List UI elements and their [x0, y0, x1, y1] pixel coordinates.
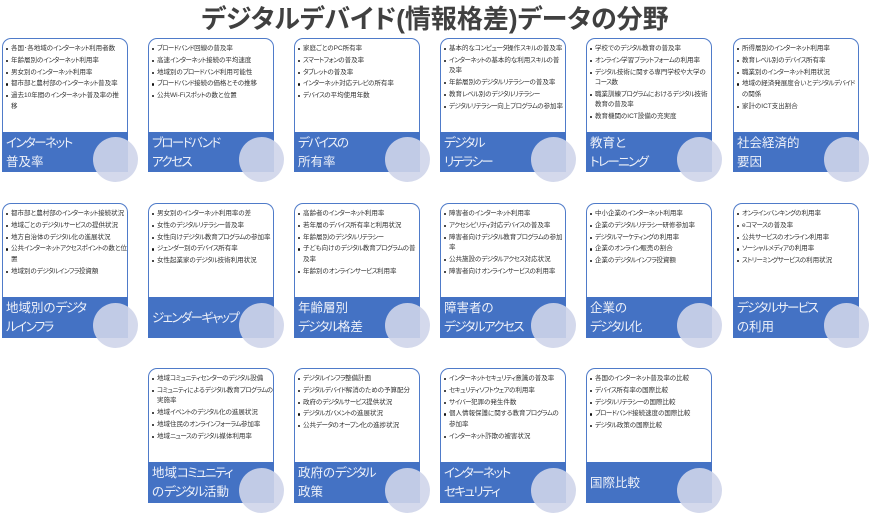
panel: デジタルサービスの利用: ソーシャルメディアの利用率 — [742, 245, 814, 252]
panel: 教育とトレーニング: 職業訓練プログラムにおけるデジタル技術 — [595, 91, 708, 98]
panel: デジタルリテラシー: 年齢層別のデジタルリテラシーの普及率 — [449, 79, 555, 86]
panel: デバイスの所有率 — [294, 38, 430, 182]
panel: 教育とトレーニング: 教育機関のICT設備の充実度 — [595, 113, 677, 120]
panel: ブロードバンドアクセス: 地域別のブロードバンド利用可能性 — [157, 69, 252, 76]
panel: インターネット普及率: 男女別のインターネット利用率 — [11, 69, 92, 76]
panel: 地域別のデジタルインフラ: 地方自治体のデジタル化の進展状況 — [11, 234, 110, 241]
panel: デジタルリテラシー — [440, 38, 576, 182]
panel: インターネット普及率: 年齢層別のインターネット利用率 — [11, 57, 99, 64]
panel: ジェンダーギャップ: 女性起業家のデジタル技術利用状況 — [157, 257, 257, 264]
panel: デバイスの所有率: 家庭ごとのPC所有率 — [303, 45, 362, 52]
panel: ブロードバンドアクセス: ブロードバンド回線の普及率 — [157, 45, 233, 52]
panel: ジェンダーギャップ: 女性のデジタルリテラシー普及率 — [157, 222, 244, 229]
panel: 社会経済的要因 — [733, 38, 869, 182]
panel: デジタルリテラシー: 教育レベル別のデジタルリテラシー — [449, 91, 540, 98]
panel: 企業のデジタル化: 企業の — [590, 301, 627, 315]
panel: デジタルリテラシー: デジタルリテラシー向上プログラムの参加率 — [449, 103, 563, 110]
panel: ジェンダーギャップ: ジェンダーギャップ — [152, 311, 238, 325]
title: デジタルデバイド(情報格差)データの分野 — [201, 4, 669, 34]
panel: ブロードバンドアクセス: ブロードバンド接続の価格とその推移 — [157, 80, 257, 87]
panel: 地域コミュニティのデジタル活動: 地域イベントのデジタル化の進展状況 — [157, 409, 258, 416]
panel: 政府のデジタル政策: 政策 — [298, 485, 323, 499]
panel: ジェンダーギャップ — [148, 203, 284, 348]
panel: 国際比較: 各国のインターネット普及率の比較 — [595, 375, 689, 382]
panel: 教育とトレーニング — [586, 38, 722, 182]
panel: 企業のデジタル化: 企業のデジタルインフラ投資額 — [595, 257, 676, 264]
panel: 社会経済的要因: 教育レベル別のデバイス所有率 — [742, 57, 825, 64]
panel: 年齢層別デジタル格差 — [294, 203, 430, 348]
panel: 地域別のデジタルインフラ: 置 — [11, 256, 18, 263]
panel: 年齢層別デジタル格差: 及率 — [303, 256, 316, 263]
panel: 障害者のデジタルアクセス: 障害者向けデジタル教育プログラムの参加 — [449, 234, 563, 241]
panel: 教育とトレーニング: 教育の普及率 — [595, 101, 634, 108]
panel: 障害者のデジタルアクセス — [440, 203, 576, 348]
panel: 社会経済的要因: 所得層別のインターネット利用率 — [742, 45, 830, 52]
panel: インターネットセキュリティ: インターネット詐欺の被害状況 — [449, 433, 530, 440]
panel: 地域コミュニティのデジタル活動: のデジタル活動 — [152, 485, 229, 499]
panel: 企業のデジタル化: 企業のデジタルリテラシー研修参加率 — [595, 222, 695, 229]
panel: 企業のデジタル化: デジタル化 — [590, 320, 642, 334]
panel: 政府のデジタル政策 — [294, 368, 430, 513]
panel: 地域別のデジタルインフラ: 公共インターネットアクセスポイントの数と位 — [11, 245, 127, 252]
panel: 政府のデジタル政策: デジタルデバイド解消のための予算配分 — [303, 387, 410, 394]
panel: 障害者のデジタルアクセス: 率 — [449, 244, 456, 251]
panel: 地域別のデジタルインフラ: 地域ごとのデジタルサービスの提供状況 — [11, 222, 118, 229]
panel: 国際比較: デジタル政策の国際比較 — [595, 422, 662, 429]
panel: 政府のデジタル政策: デジタルインフラ整備計画 — [303, 375, 371, 382]
panel: デバイスの所有率: デバイスの平均使用年数 — [303, 92, 370, 99]
panel: 障害者のデジタルアクセス: 障害者向けオンラインサービスの利用率 — [449, 268, 555, 275]
panel: 国際比較 — [586, 368, 722, 513]
panel: デバイスの所有率: 所有率 — [298, 154, 336, 168]
panel: ブロードバンドアクセス — [148, 38, 284, 182]
panel: 社会経済的要因: 家計のICT支出割合 — [742, 103, 798, 110]
panel: ブロードバンドアクセス: アクセス — [152, 154, 191, 168]
panel: 年齢層別デジタル格差: 若年層のデバイス所有率と利用状況 — [303, 222, 401, 229]
panel: 教育とトレーニング: 学校でのデジタル教育の普及率 — [595, 45, 681, 52]
panel: 地域コミュニティのデジタル活動 — [148, 368, 284, 513]
panel: 年齢層別デジタル格差: デジタル格差 — [298, 320, 363, 334]
panel: 企業のデジタル化 — [586, 203, 722, 348]
panel: 障害者のデジタルアクセス: アクセシビリティ対応デバイスの普及率 — [449, 222, 550, 229]
panel: デジタルリテラシー: 及率 — [449, 67, 462, 74]
panel: インターネットセキュリティ: サイバー犯罪の発生件数 — [449, 399, 516, 406]
panel: 国際比較: 国際比較 — [590, 476, 640, 490]
panel: 企業のデジタル化: デジタルマーケティングの利用率 — [595, 234, 679, 241]
panel: 教育とトレーニング: コース数 — [595, 79, 618, 86]
panel: デジタルサービスの利用: ストリーミングサービスの利用状況 — [742, 257, 832, 264]
panel: 国際比較: デバイス所有率の国際比較 — [595, 387, 668, 394]
panel: デバイスの所有率: スマートフォンの普及率 — [303, 57, 364, 64]
panel: 地域コミュニティのデジタル活動: 地域コミュニティセンターのデジタル設備 — [157, 375, 263, 382]
panel: 地域別のデジタルインフラ: 地域別のデジタ — [6, 301, 85, 315]
panel: 障害者のデジタルアクセス: 障害者の — [444, 301, 494, 315]
panel: 年齢層別デジタル格差: 子ども向けのデジタル教育プログラムの普 — [303, 245, 415, 252]
panel: 障害者のデジタルアクセス: 公共施設のデジタルアクセス対応状況 — [449, 256, 551, 263]
panel: 障害者のデジタルアクセス: 障害者のインターネット利用率 — [449, 210, 530, 217]
panel: 教育とトレーニング: トレーニング — [590, 154, 647, 168]
panel: デジタルサービスの利用: デジタルサービス — [737, 301, 817, 315]
panel: インターネットセキュリティ: インターネット — [444, 466, 510, 480]
panel: 社会経済的要因: 社会経済的 — [737, 136, 800, 150]
panel: 地域コミュニティのデジタル活動: 地域ニュースのデジタル媒体利用率 — [157, 433, 252, 440]
panel: 社会経済的要因: 地域の経済発展度合いとデジタルデバイド — [742, 80, 855, 87]
panel: インターネット普及率 — [2, 38, 138, 182]
panel: インターネットセキュリティ: 個人情報保護に関する教育プログラムの — [449, 410, 559, 417]
panel: デジタルリテラシー: インターネットの基本的な利用スキルの普 — [449, 57, 559, 64]
panel: ジェンダーギャップ: ジェンダー別のデバイス所有率 — [157, 245, 238, 252]
panel: 国際比較: ブロードバンド接続速度の国際比較 — [595, 410, 690, 417]
panel: インターネット普及率: 移 — [11, 103, 18, 110]
panel: デジタルリテラシー: リテラシー — [444, 154, 492, 168]
panel: デジタルサービスの利用: eコマースの普及率 — [742, 222, 793, 229]
panel: デジタルサービスの利用: の利用 — [737, 320, 774, 334]
panel: 地域別のデジタルインフラ — [2, 203, 138, 348]
panel: 年齢層別デジタル格差: 年齢層別 — [298, 301, 348, 315]
panel: 年齢層別デジタル格差: 高齢者のインターネット利用率 — [303, 210, 384, 217]
panel: 国際比較: デジタルリテラシーの国際比較 — [595, 399, 676, 406]
panel: 政府のデジタル政策: 公共データのオープン化の進捗状況 — [303, 422, 399, 429]
panel: インターネット普及率: 過去10年間のインターネット普及率の推 — [11, 92, 119, 99]
panel: デジタルリテラシー: デジタル — [444, 136, 484, 150]
panel: インターネットセキュリティ: セキュリティ — [444, 485, 499, 499]
panel: 政府のデジタル政策: 政府のデジタルサービス提供状況 — [303, 399, 392, 406]
panel: デジタルサービスの利用: 公共サービスのオンライン利用率 — [742, 234, 829, 241]
panel: インターネット普及率: 都市部と農村部のインターネット普及率 — [11, 80, 118, 87]
panel: インターネット普及率: インターネット — [6, 136, 72, 150]
panel: 政府のデジタル政策: 政府のデジタル — [298, 466, 375, 480]
panel: ブロードバンドアクセス: 高速インターネット接続の平均速度 — [157, 57, 251, 64]
panel: 社会経済的要因: 要因 — [737, 154, 762, 168]
panel: ブロードバンドアクセス: ブロードバンド — [152, 136, 220, 150]
panel: 地域コミュニティのデジタル活動: 地域住民のオンラインフォーラム参加率 — [157, 421, 260, 428]
panel: インターネットセキュリティ: 参加率 — [449, 421, 468, 428]
panel: 地域コミュニティのデジタル活動: 地域コミュニティ — [152, 466, 232, 480]
panel: 教育とトレーニング: オンライン学習プラットフォームの利用率 — [595, 57, 700, 64]
panel: 障害者のデジタルアクセス: デジタルアクセス — [444, 320, 523, 334]
panel: 社会経済的要因: 職業別のインターネット利用状況 — [742, 69, 830, 76]
panel: インターネットセキュリティ — [440, 368, 576, 513]
panel: ジェンダーギャップ: 男女別のインターネット利用率の差 — [157, 210, 251, 217]
panel: 年齢層別デジタル格差: 年齢層別のデジタルリテラシー — [303, 234, 384, 241]
panel: 企業のデジタル化: 企業のオンライン販売の割合 — [595, 245, 673, 252]
panel: 企業のデジタル化: 中小企業のインターネット利用率 — [595, 210, 683, 217]
panel: インターネットセキュリティ: セキュリティソフトウェアの利用率 — [449, 387, 535, 394]
panel: 政府のデジタル政策: デジタルガバメントの進展状況 — [303, 410, 383, 417]
panel: デジタルサービスの利用 — [733, 203, 869, 348]
panel: 地域コミュニティのデジタル活動: 実施率 — [157, 397, 176, 404]
panel: ジェンダーギャップ: 女性向けデジタル教育プログラムの参加率 — [157, 234, 271, 241]
panel: デジタルリテラシー: 基本的なコンピュータ操作スキルの普及率 — [449, 45, 562, 52]
panel: ブロードバンドアクセス: 公共Wi-Fiスポットの数と位置 — [157, 92, 237, 99]
panel: デバイスの所有率: インターネット対応テレビの所有率 — [303, 80, 394, 87]
panel: インターネット普及率: 各国･各地域のインターネット利用者数 — [11, 45, 115, 52]
panel: デバイスの所有率: デバイスの — [298, 136, 349, 150]
panel: 教育とトレーニング: 教育と — [590, 136, 626, 150]
panel: 地域コミュニティのデジタル活動: コミュニティによるデジタル教育プログラムの — [157, 387, 273, 394]
panel: 年齢層別デジタル格差: 年齢別のオンラインサービス利用率 — [303, 268, 397, 275]
panel: 地域別のデジタルインフラ: ルインフラ — [6, 320, 53, 334]
panel: 地域別のデジタルインフラ: 地域別のデジタルインフラ投資額 — [11, 268, 98, 275]
panel: デバイスの所有率: タブレットの普及率 — [303, 69, 353, 76]
panel: インターネット普及率: 普及率 — [6, 154, 44, 168]
panel: デジタルサービスの利用: オンラインバンキングの利用率 — [742, 210, 821, 217]
panel: 教育とトレーニング: デジタル技術に関する専門学校や大学の — [595, 69, 706, 76]
panel: 地域別のデジタルインフラ: 都市部と農村部のインターネット接続状況 — [11, 210, 124, 217]
panel: インターネットセキュリティ: インターネットセキュリティ意識の普及率 — [449, 375, 554, 382]
panel: 社会経済的要因: の関係 — [742, 91, 761, 98]
